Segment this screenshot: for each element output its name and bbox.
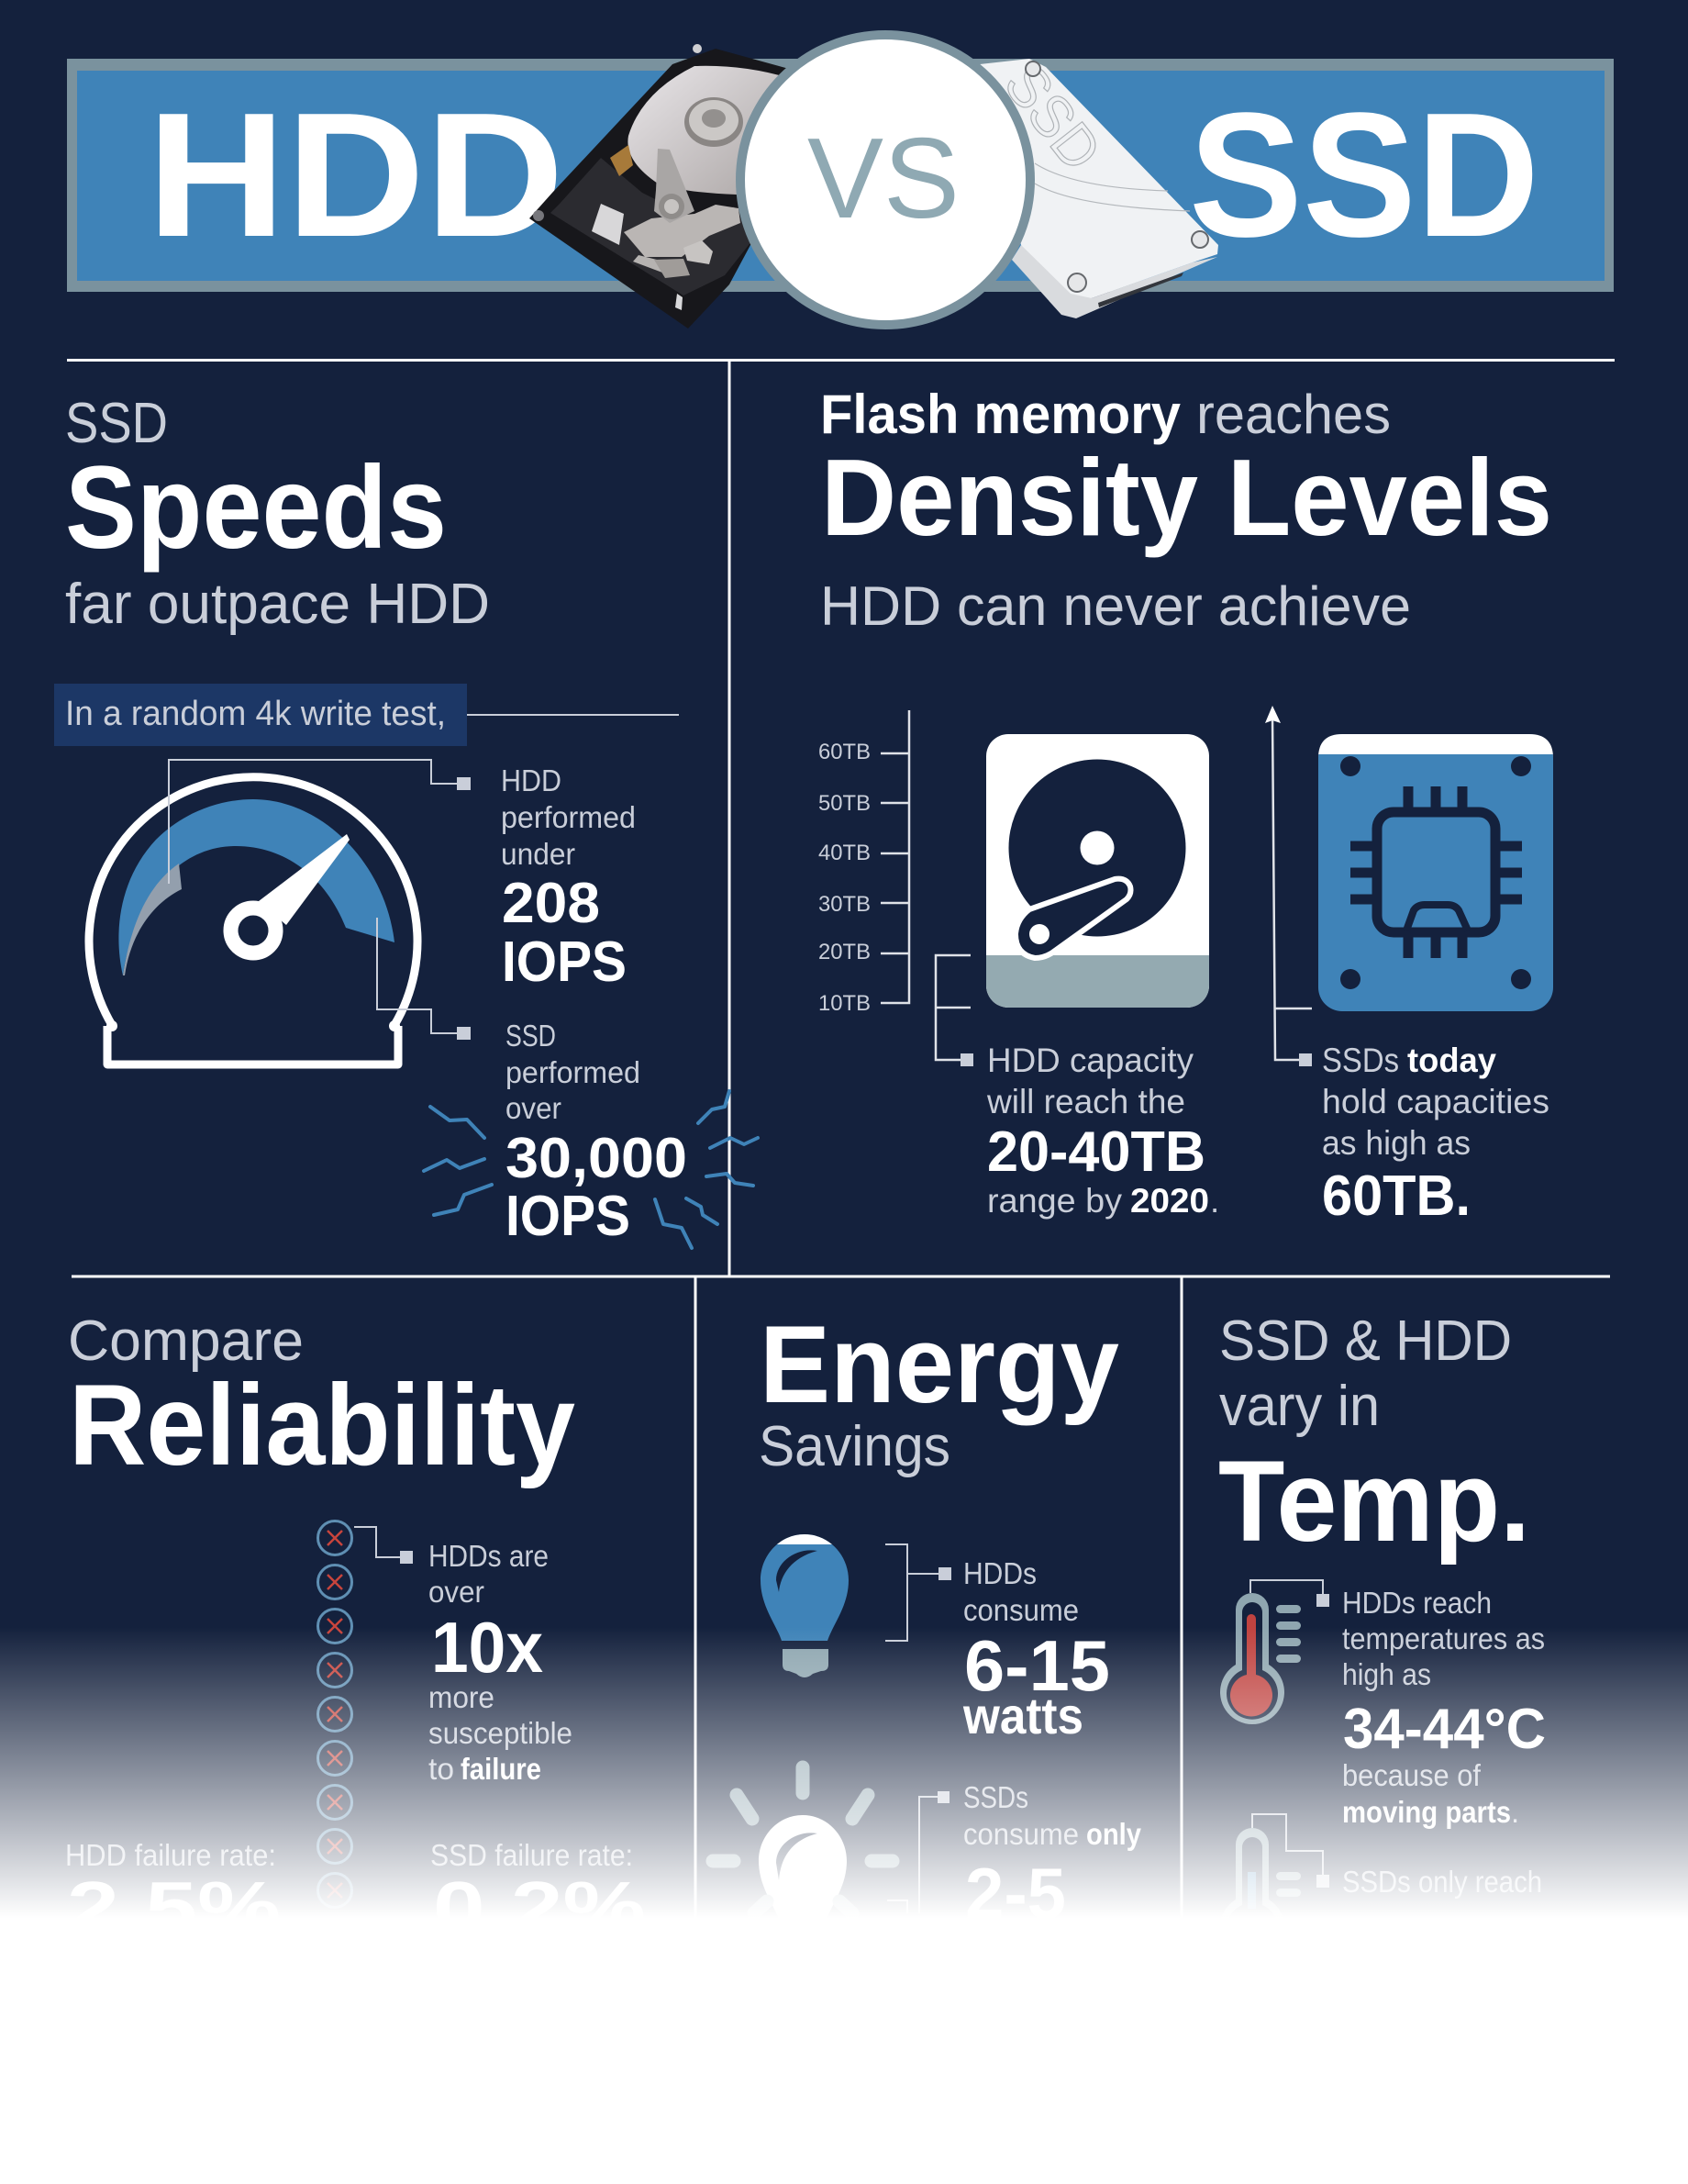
text: 10x more susceptible: over: [428, 1575, 484, 1609]
heading: SSD Speeds: far outpace HDD: [65, 573, 490, 636]
text: HDDs consume 6-15 watts: [962, 1556, 1110, 1744]
heading: compare reliability: Reliability: [69, 1362, 575, 1489]
stat: HDD failure rate: [65, 1838, 281, 1948]
text: HDD capacity: 20-40TB: [987, 1120, 1205, 1184]
connector: SSD: [377, 918, 471, 1040]
text: HDD temperature: moving parts: [1342, 1795, 1511, 1829]
solid state drive photo illustration: [980, 51, 1218, 318]
icon: dim bulb: [761, 1534, 849, 1677]
connector: HDDs reach: [1250, 1580, 1329, 1607]
text: HDDs consume 6-15 watts: consume: [963, 1593, 1079, 1627]
text: SSD performed over 30,000 IOPS: [505, 1019, 687, 1248]
title banner: [67, 35, 1614, 329]
text: 10x more susceptible: failure: [461, 1752, 541, 1786]
text: SSD performed over 30,000 IOPS: SSD: [505, 1019, 556, 1053]
text: HDD temperature: high as: [1342, 1657, 1431, 1691]
panel: temperature: [1218, 1309, 1546, 1959]
text: SSD capacity: [1322, 1042, 1549, 1228]
text: SSD performed over 30,000 IOPS: 30,000: [505, 1127, 687, 1190]
chart: capacity axis: 60TB: [818, 740, 871, 764]
callout: random 4k write test: [54, 684, 679, 746]
icon: hard disk card: [986, 734, 1209, 1008]
VS circle: [740, 35, 1030, 325]
stat: HDD failure rate: HDD failure rate:: [65, 1838, 276, 1872]
text: SSD temperature: SSDs only reach: [1342, 1865, 1542, 1899]
text: HDD temperature: because of: [1342, 1758, 1482, 1792]
chart: capacity axis: 20TB: [818, 940, 871, 964]
text: HDD performed under 208 IOPS: HDD: [501, 763, 561, 797]
text: 10x more susceptible: [428, 1539, 572, 1786]
heading: flash memory density levels: HDD can never achieve: [820, 575, 1411, 637]
text: SSD performed over 30,000 IOPS: performed: [505, 1055, 640, 1089]
text: HDD temperature: HDDs reach: [1342, 1586, 1492, 1620]
icon: cool thermometer: [1220, 1828, 1301, 1959]
text: 10x more susceptible: more: [428, 1680, 494, 1714]
connector: HDD: [169, 760, 471, 884]
text: HDD capacity: 2020: [1130, 1182, 1209, 1220]
white fade-out overlay: [0, 1627, 1688, 2184]
heading: energy savings: Energy: [760, 1303, 1119, 1426]
connector: SSDs reach: [1252, 1814, 1329, 1888]
chart: capacity axis: 50TB: [818, 791, 871, 816]
heading: SSD Speeds: [65, 392, 490, 636]
text: SSDs consume only 2-5: 2-5: [965, 1853, 1066, 1933]
icon: speedometer gauge: [89, 777, 417, 1064]
solid state drive photo illustration: SSD: [992, 51, 1115, 183]
connector: SSDs consume: [887, 1791, 950, 1913]
panel: SSD speeds: [54, 392, 758, 1248]
heading: SSD & HDD vary in temp: [1218, 1309, 1530, 1566]
text: SSDs consume only 2-5: consume: [963, 1817, 1079, 1851]
SSD title: SSD: [1189, 75, 1539, 273]
text: HDD temperature: temperatures as: [1342, 1621, 1545, 1655]
text: SSDs consume only 2-5: [963, 1780, 1142, 1933]
text: SSDs consume only 2-5: SSDs: [963, 1780, 1028, 1814]
connector: HDDs failure: [354, 1527, 413, 1564]
text: HDD performed under 208 IOPS: IOPS: [502, 930, 627, 994]
heading: flash memory density levels: reaches: [1196, 384, 1391, 445]
chart: capacity axis: 40TB: [818, 841, 871, 865]
panel: energy savings: [713, 1303, 1142, 1933]
icon: solid state card: [1318, 734, 1553, 1011]
panel: reliability: [65, 1309, 646, 1948]
text: SSD capacity: today: [1407, 1042, 1496, 1079]
panel: density levels: [818, 384, 1553, 1228]
icon: lit bulb: [713, 1767, 893, 1922]
text: HDDs consume 6-15 watts: watts: [962, 1687, 1083, 1744]
text: 10x more susceptible: to: [428, 1752, 454, 1786]
text: 10x more susceptible: 10x: [431, 1607, 543, 1688]
chart: capacity axis: 10TB: [818, 991, 871, 1016]
HDD title: HDD: [147, 75, 564, 273]
text: SSD capacity: as high as: [1322, 1124, 1471, 1162]
hard drive photo illustration: [529, 44, 798, 329]
heading: flash memory density levels: [820, 384, 1552, 637]
chart: capacity axis: [818, 710, 909, 1016]
heading: SSD & HDD vary in temp: Temp.: [1218, 1438, 1530, 1566]
icon: blue speed sparks: [424, 1091, 758, 1248]
stat: SSD failure rate: [430, 1838, 646, 1948]
text: SSD capacity: 60TB.: [1322, 1164, 1471, 1228]
callout: random 4k write test: In a random 4k write test,: [65, 695, 446, 733]
heading: SSD & HDD vary in temp: vary in: [1219, 1375, 1380, 1438]
text: HDD performed under 208 IOPS: [501, 763, 636, 994]
heading: compare reliability: Compare: [68, 1309, 304, 1373]
text: HDD performed under 208 IOPS: performed: [501, 800, 636, 834]
stat: SSD failure rate: SSD failure rate:: [430, 1838, 633, 1872]
text: HDD temperature: [1342, 1586, 1546, 1829]
text: SSD performed over 30,000 IOPS: over: [505, 1091, 561, 1125]
text: SSD performed over 30,000 IOPS: IOPS: [505, 1185, 630, 1248]
text: SSD capacity: hold capacities: [1322, 1083, 1549, 1120]
banner frame: [67, 59, 1614, 292]
heading: flash memory density levels: Flash memory: [820, 384, 1182, 445]
text: SSD capacity: SSDs: [1322, 1042, 1399, 1079]
text: HDD capacity: will reach the: [986, 1083, 1185, 1120]
text: 10x more susceptible: susceptible: [428, 1716, 572, 1750]
text: HDD capacity: range by: [987, 1182, 1122, 1220]
bracket: HDD capacity range: [936, 955, 973, 1066]
heading: flash memory density levels: Density Levels: [821, 437, 1552, 559]
arrow: SSD capacity: [1265, 706, 1312, 1066]
icon: hot thermometer: [1220, 1593, 1301, 1724]
heading: energy savings: [759, 1303, 1119, 1478]
text: HDD temperature: .: [1511, 1795, 1519, 1829]
VS text: VS: [807, 116, 960, 242]
bracket: HDDs consume: [885, 1544, 951, 1641]
text: HDDs consume 6-15 watts: HDDs: [963, 1556, 1037, 1590]
text: HDD capacity: HDD capacity: [987, 1042, 1194, 1079]
text: HDD performed under 208 IOPS: under: [501, 837, 575, 871]
chart: capacity axis: 30TB: [818, 892, 871, 917]
section divider lines: [67, 360, 1615, 1918]
text: HDDs consume 6-15 watts: 6-15: [964, 1625, 1110, 1706]
icon: failure marks column: [317, 1521, 352, 1907]
heading: SSD & HDD vary in temp: SSD & HDD: [1219, 1309, 1512, 1373]
text: SSDs consume only 2-5: only: [1086, 1817, 1142, 1851]
stat: HDD failure rate: 2.5%: [67, 1866, 281, 1948]
heading: SSD Speeds: SSD: [65, 392, 168, 455]
text: 10x more susceptible: HDDs are: [428, 1539, 549, 1573]
text: HDD capacity: .: [1210, 1182, 1219, 1220]
text: HDD capacity: [986, 1042, 1219, 1220]
heading: SSD Speeds: Speeds: [65, 442, 447, 574]
text: HDD performed under 208 IOPS: 208: [502, 872, 600, 935]
text: HDD temperature: 34-44°C: [1343, 1698, 1546, 1761]
heading: compare reliability: [68, 1309, 575, 1489]
heading: energy savings: Savings: [759, 1415, 950, 1478]
stat: SSD failure rate: 0.2%: [433, 1866, 646, 1948]
